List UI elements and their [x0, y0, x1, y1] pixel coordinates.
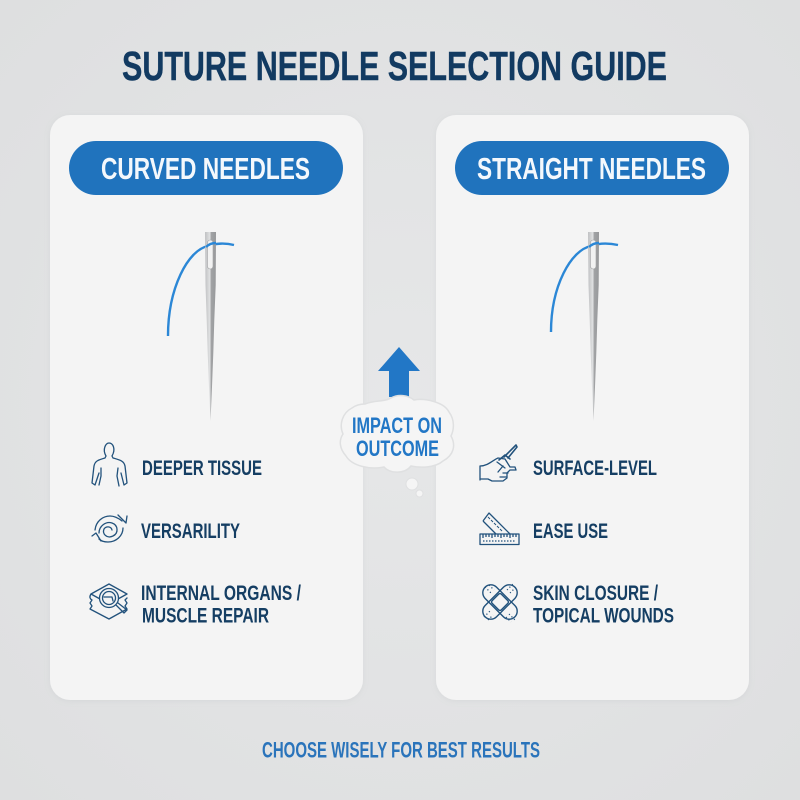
icon: straight needle with thread [551, 232, 618, 421]
heading: curved needles: CURVED NEEDLES [101, 152, 310, 186]
callout: impact on outcome: IMPACT ON [352, 413, 442, 438]
panel: straight needles [436, 115, 749, 700]
icon: hand holding scalpel [480, 445, 517, 481]
heading: straight needles [455, 141, 729, 195]
callout: impact on outcome: OUTCOME [356, 436, 439, 461]
text: versarility: VERSARILITY [141, 519, 240, 543]
icon: tissue layers with magnifier [90, 584, 127, 619]
icon: human body [92, 443, 127, 486]
icon: curved needle with thread [168, 232, 234, 421]
text: surface-level: SURFACE-LEVEL [533, 456, 657, 480]
footer tagline: CHOOSE WISELY FOR BEST RESULTS [262, 738, 540, 762]
icon: rulers [480, 513, 519, 544]
text: skin closure / topical wounds: SKIN CLOSURE / [533, 581, 658, 605]
icon: crossed bandages [479, 581, 521, 623]
text: deeper tissue: DEEPER TISSUE [142, 456, 262, 480]
text: skin closure / topical wounds [533, 581, 674, 628]
arrow: impact upward [378, 347, 420, 397]
panel: curved needles [50, 115, 363, 700]
heading: straight needles: STRAIGHT NEEDLES [477, 152, 706, 186]
text: ease use: EASE USE [533, 519, 608, 543]
callout: impact on outcome [340, 396, 454, 497]
text: internal organs / muscle repair [141, 581, 301, 628]
text: skin closure / topical wounds: TOPICAL WOUNDS [533, 604, 674, 628]
text: internal organs / muscle repair: INTERNAL ORGANS / [141, 581, 301, 605]
text: internal organs / muscle repair: MUSCLE REPAIR [142, 604, 269, 628]
heading: curved needles [69, 141, 343, 195]
icon: spiral arrows [92, 515, 127, 542]
